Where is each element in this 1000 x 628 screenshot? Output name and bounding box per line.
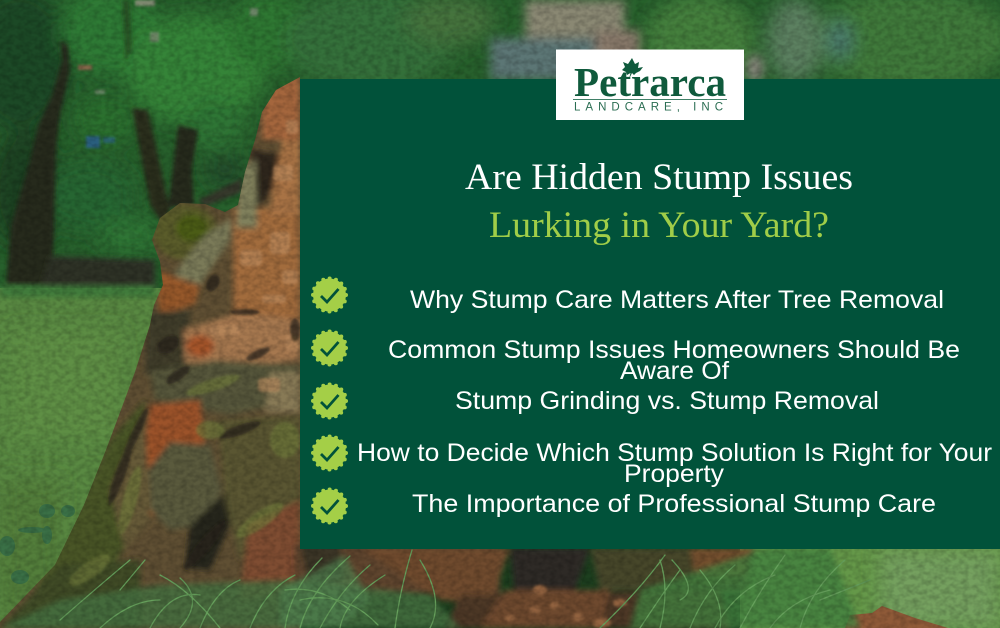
grass blades around the base [0, 548, 870, 628]
item 4: Property [624, 460, 725, 488]
logo wordmark: Petrarca [574, 59, 726, 105]
logo: Petrarca Landcare [556, 50, 744, 120]
item 5: The Importance of Professional Stump Care [412, 490, 936, 518]
heading line 2: Lurking in Your Yard? [489, 205, 829, 246]
stump body and bark [0, 70, 300, 628]
small leaves at lower left [0, 504, 75, 584]
item 2 [313, 332, 960, 385]
logo subtitle: LANDCARE, INC [574, 102, 723, 114]
forest foliage backdrop [0, 0, 1000, 300]
bark chunk on the lawn [845, 606, 948, 628]
item 1: Why Stump Care Matters After Tree Removal [410, 286, 944, 314]
item 4: How to Decide Which Stump Solution Is Right for Your [357, 439, 992, 467]
item 3: Stump Grinding vs. Stump Removal [455, 387, 879, 415]
item 5 [313, 490, 936, 522]
blue sky gap [86, 136, 100, 148]
item 4 [313, 436, 992, 488]
heading line 1: Are Hidden Stump Issues [465, 157, 853, 198]
icon: maple leaf [622, 58, 643, 79]
background tree trunks [6, 0, 242, 287]
stump base and mulch along the bottom [295, 545, 755, 628]
dark ground strip under the trees [40, 256, 155, 290]
heading [465, 157, 853, 246]
panel: green content card [300, 79, 1000, 549]
lawn [0, 285, 1000, 628]
item 2: Aware Of [620, 357, 729, 385]
pale light spots in canopy [135, 0, 155, 6]
checklist [313, 278, 992, 522]
item 3 [313, 384, 879, 418]
fine bark flecks [65, 120, 300, 591]
item 2: Common Stump Issues Homeowners Should Be [388, 336, 960, 364]
item 1 [313, 278, 944, 314]
pale building behind the trees [490, 0, 764, 82]
